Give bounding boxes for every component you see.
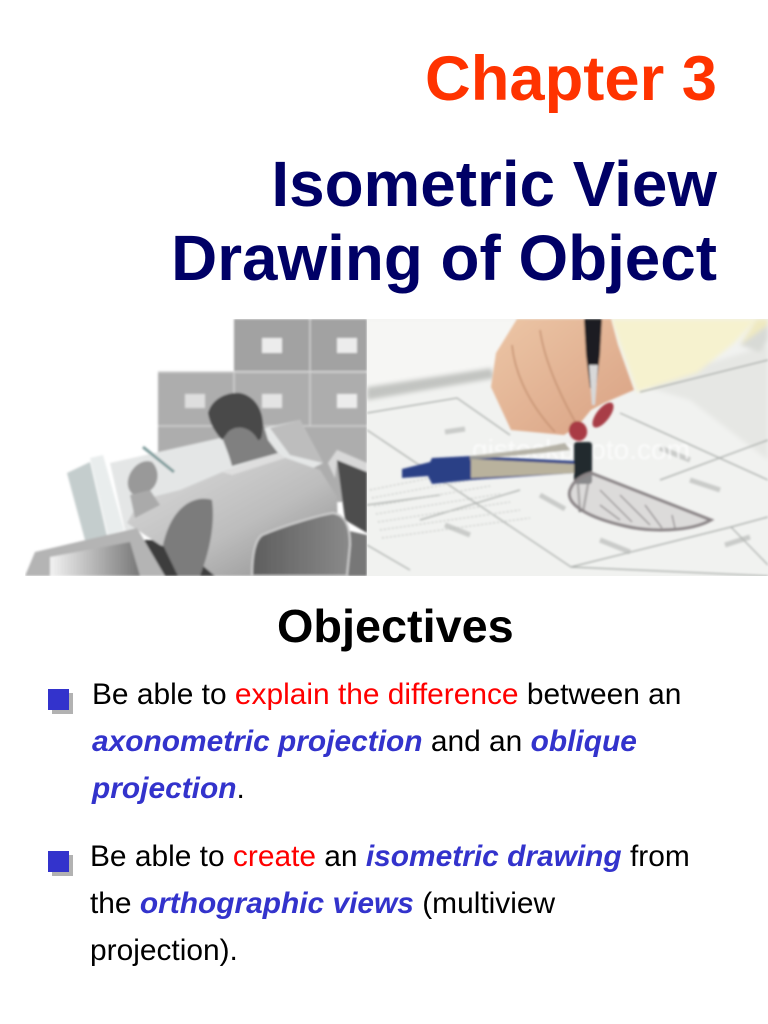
bullet square 1: [48, 689, 73, 714]
neck and head: [220, 420, 278, 466]
heading: objectives: Objectives: [277, 600, 514, 652]
draftsman coat: [127, 457, 345, 576]
drawing board: [67, 420, 323, 540]
objective 2 text: the orthographic views (multiview: [90, 887, 555, 920]
objective 1 text: projection.: [92, 772, 245, 804]
hand and pen: [143, 447, 174, 472]
title: Drawing of Object: [171, 222, 717, 294]
title: [171, 148, 718, 294]
protractor: [569, 473, 711, 530]
dark desk: [140, 540, 230, 576]
nails: [566, 418, 590, 444]
compass: [402, 456, 574, 484]
right monitor: [328, 450, 367, 576]
table background and rolled sheets: [367, 319, 768, 460]
objective 1 text: Be able to explain the difference between an: [92, 678, 681, 710]
objective 2 text: projection).: [90, 934, 238, 967]
objective 2 text: [90, 840, 690, 967]
chapter heading: Chapter 3: [425, 44, 717, 114]
hand: [491, 319, 634, 435]
pencil: [584, 319, 602, 388]
title: Isometric View: [271, 148, 717, 220]
objective 1 text: axonometric projection and an oblique: [92, 724, 637, 758]
left monitor: [25, 528, 165, 576]
watermark: gistockphoto.com: [472, 434, 690, 465]
chair: [252, 513, 350, 576]
bullet square 2: [48, 851, 73, 876]
objective 1 text: [91, 678, 681, 804]
illustration: draftsman at drawing board: [25, 319, 367, 576]
photo: hand drafting on blueprints: [367, 319, 768, 576]
objective 2 text: Be able to create an isometric drawing from: [90, 840, 690, 873]
blueprint lines: [367, 360, 768, 576]
filing cabinets: [158, 319, 367, 502]
